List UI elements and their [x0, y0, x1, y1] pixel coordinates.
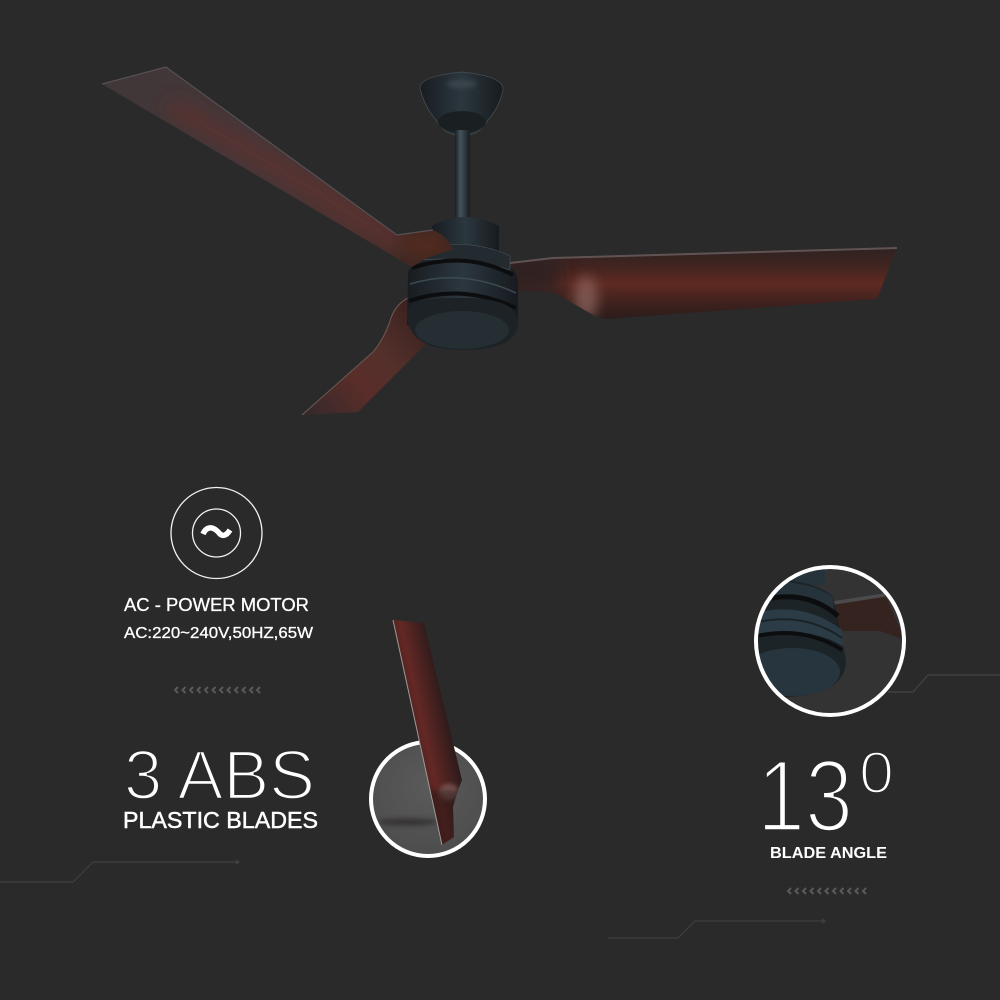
degree mark: 0 — [859, 740, 894, 806]
heading: 3 ABS: 3 ABS — [124, 736, 315, 814]
divider: chevrons left — [175, 687, 260, 693]
heading: AC power motor: AC - POWER MOTOR — [124, 595, 309, 615]
ceiling fan — [102, 67, 897, 415]
decorative circuit line right — [888, 675, 1000, 692]
fan blade: lower left — [302, 296, 428, 415]
fan blade: upper left — [102, 67, 453, 267]
decorative circuit line bottom — [608, 918, 826, 938]
icon: AC tilde — [171, 488, 262, 578]
text: AC specifications: AC:220~240V,50HZ,65W — [124, 625, 313, 642]
heading: 13 degrees: 13 — [757, 739, 853, 853]
text: blade angle: BLADE ANGLE — [770, 845, 887, 862]
ceiling canopy — [420, 72, 503, 136]
text: plastic blades: PLASTIC BLADES — [123, 807, 318, 833]
blade shadow — [378, 818, 438, 826]
hub detail circle — [744, 565, 905, 715]
blade side view — [393, 620, 462, 845]
fan blade: right — [490, 247, 897, 320]
motor housing — [407, 217, 518, 350]
decorative circuit line left — [0, 859, 240, 882]
blade detail circle — [371, 620, 485, 856]
downrod — [455, 130, 470, 218]
divider: chevrons right — [788, 888, 866, 894]
